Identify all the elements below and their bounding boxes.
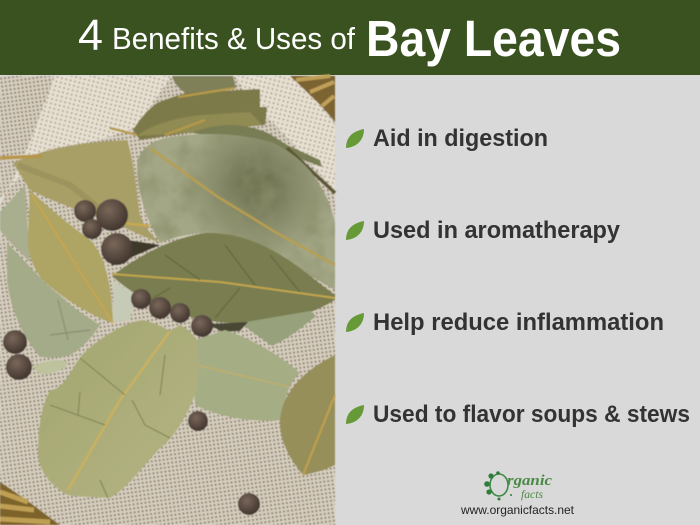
benefit 3: Help reduce inflammation xyxy=(373,309,664,336)
shadow gap under berries xyxy=(105,240,160,266)
header band xyxy=(0,0,700,75)
top leaves cluster xyxy=(110,76,335,193)
icon: leaf bullet xyxy=(346,221,364,240)
title: 4 xyxy=(78,11,103,60)
shadow near berries xyxy=(208,322,248,332)
benefit 4: Used to flavor soups & stews xyxy=(373,401,690,428)
title xyxy=(78,10,621,67)
icon: leaf bullet xyxy=(346,129,364,148)
benefit 1: Aid in digestion xyxy=(373,125,548,152)
title: Benefits & Uses of xyxy=(112,21,355,56)
leaf: tucked lower middle xyxy=(240,311,316,346)
icon: leaf bullet xyxy=(346,405,364,424)
leaf: lower right pale xyxy=(195,330,300,421)
allspice berries xyxy=(3,199,260,515)
leaf: large front xyxy=(38,320,198,498)
woven basket corners xyxy=(0,76,335,525)
burlap cloth xyxy=(0,76,335,525)
leaf: olive middle xyxy=(112,233,335,323)
list: benefits xyxy=(346,125,690,428)
leaf: pale far left xyxy=(0,185,30,262)
leaf: yellow back leaf xyxy=(0,140,160,243)
logo: Organic Facts: facts xyxy=(521,487,543,501)
logo: Organic Facts xyxy=(460,471,575,517)
benefit 2: Used in aromatherapy xyxy=(373,217,621,244)
leaf: pale left lower xyxy=(7,243,100,358)
leaf: right edge xyxy=(280,355,335,475)
logo: Organic Facts: rganic xyxy=(507,473,552,489)
pale gap xyxy=(113,280,135,322)
photo: bay leaves and allspice on burlap xyxy=(0,76,335,525)
logo: Organic Facts: www.organicfacts.net xyxy=(460,503,575,517)
leaf: yellow left xyxy=(28,190,113,323)
icon: leaf bullet xyxy=(346,313,364,332)
leaf: large mottled xyxy=(137,134,335,290)
icon: leafy O emblem xyxy=(484,471,512,500)
title: Bay Leaves xyxy=(366,10,621,67)
small pale leaf xyxy=(33,360,69,374)
